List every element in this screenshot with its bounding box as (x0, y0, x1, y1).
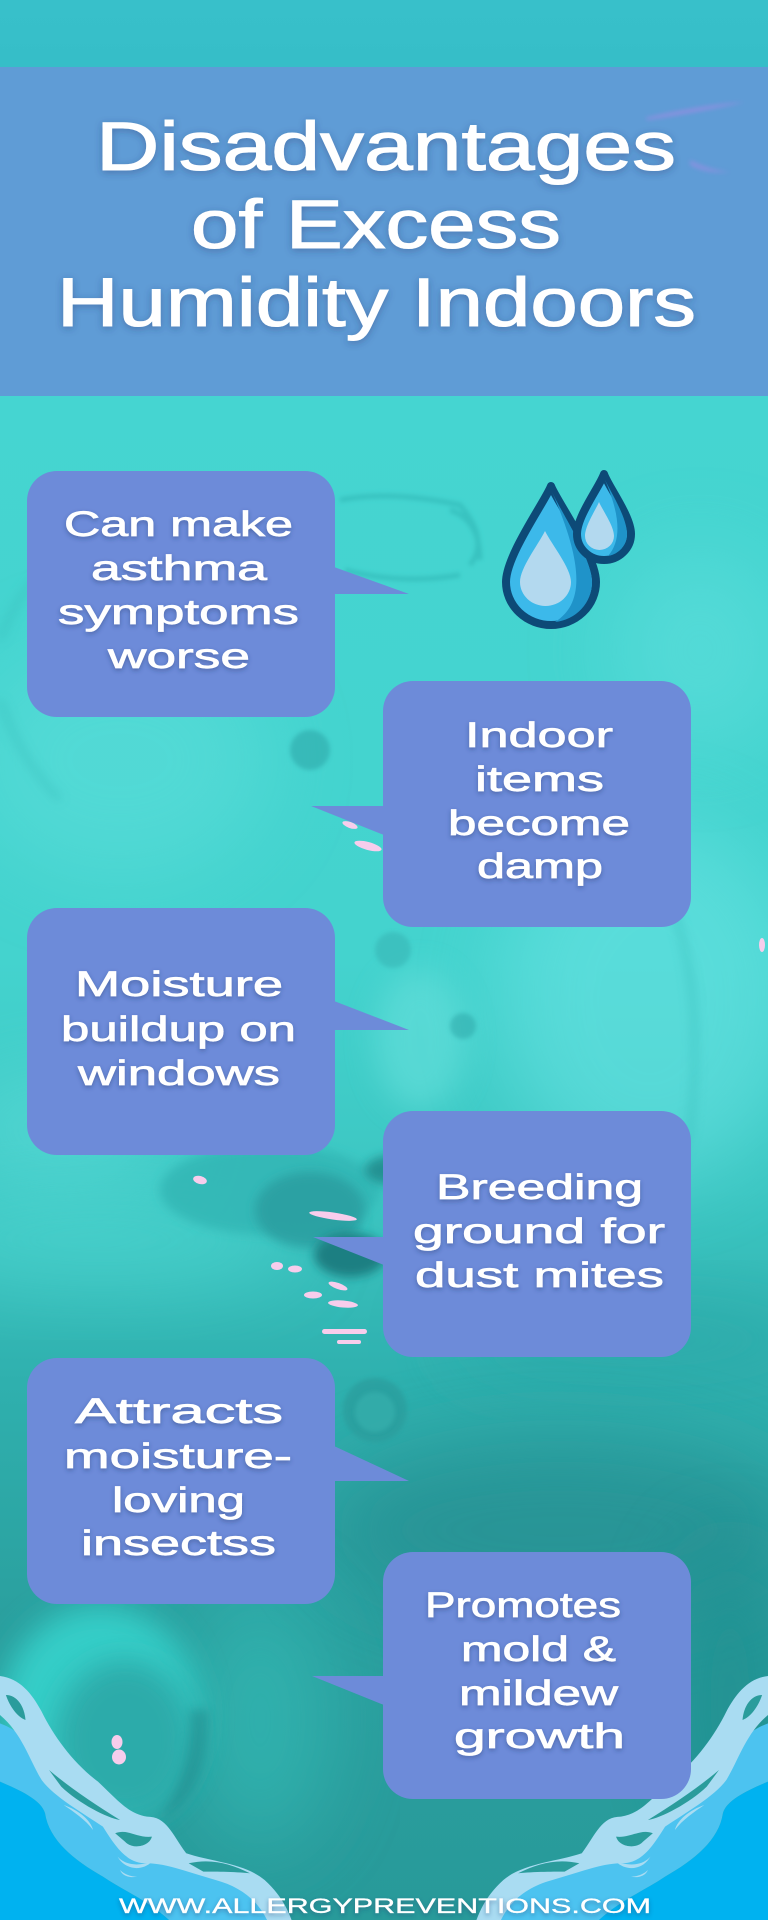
callout: mold and mildew: Promotes (425, 1586, 621, 1625)
callout: asthma symptoms (27, 471, 409, 717)
callout: insects (27, 1358, 409, 1604)
pink highlights (112, 819, 765, 1849)
callout: indoor items damp: items (475, 760, 604, 799)
callout: mold and mildew: mold & (461, 1630, 616, 1669)
splash crater (160, 1145, 380, 1235)
callout: insects: insectss (81, 1524, 276, 1563)
callout: insects: loving (112, 1481, 245, 1520)
callout: indoor items damp: Indoor (465, 716, 614, 755)
callout: dust mites (313, 1111, 691, 1357)
callout: indoor items damp (311, 681, 691, 927)
title text: Humidity Indoors (57, 264, 696, 341)
callout: mold and mildew (312, 1552, 691, 1799)
waves: left corner (0, 1676, 292, 1920)
footer website: WWW.ALLERGYPREVENTIONS.COM (119, 1895, 651, 1918)
bubble (0, 1605, 200, 1825)
ripples near the drops (340, 496, 480, 579)
callout: asthma symptoms: symptoms (58, 593, 299, 632)
callout: dust mites: ground for (413, 1212, 666, 1251)
waves: right corner (476, 1676, 768, 1920)
callout: mold and mildew: growth (454, 1717, 625, 1756)
droplets (290, 730, 330, 770)
callout: insects: Attracts (75, 1392, 283, 1431)
callout: insects: moisture- (64, 1437, 292, 1476)
title text (57, 108, 696, 341)
callout: asthma symptoms: asthma (91, 549, 268, 588)
callout: indoor items damp: damp (477, 847, 603, 886)
callout: asthma symptoms: worse (106, 637, 250, 676)
callout: moisture on windows: windows (76, 1054, 280, 1093)
callout: moisture on windows (27, 908, 409, 1155)
title text: Disadvantages (96, 108, 676, 185)
title banner (0, 67, 768, 396)
title text: of Excess (191, 186, 561, 263)
callout: asthma symptoms: Can make (64, 505, 293, 544)
callout: dust mites: dust mites (415, 1256, 664, 1295)
callout: indoor items damp: become (448, 804, 630, 843)
callout: moisture on windows: buildup on (61, 1010, 296, 1049)
callout: moisture on windows: Moisture (75, 965, 283, 1004)
icon: water drops (506, 474, 631, 625)
callout: dust mites: Breeding (436, 1168, 643, 1207)
callout: mold and mildew: mildew (459, 1674, 619, 1713)
